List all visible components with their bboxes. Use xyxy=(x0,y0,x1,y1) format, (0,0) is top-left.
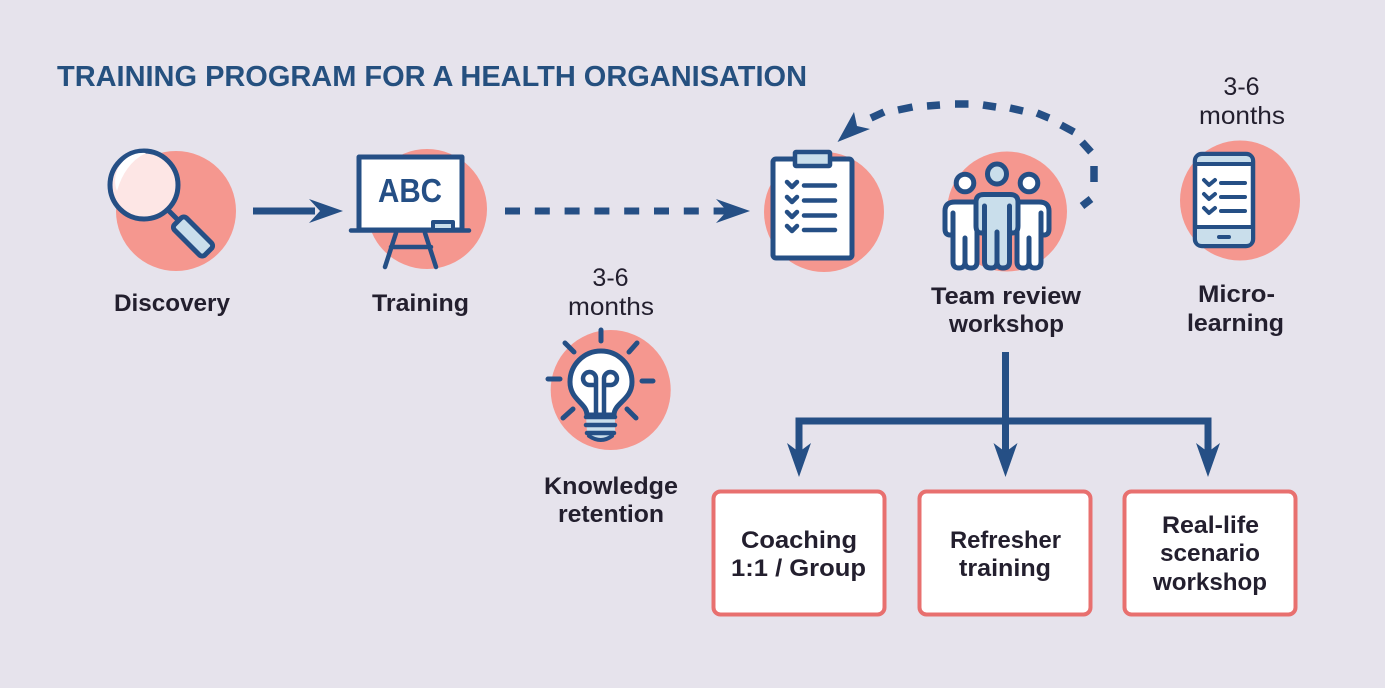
box: real-life scenario workshop: Real-life xyxy=(1162,512,1259,539)
label: Training: Training xyxy=(372,290,469,317)
icon: light bulb xyxy=(548,330,653,440)
label: Discovery: Discovery xyxy=(114,290,231,317)
label: 3-6 months: months xyxy=(568,293,654,321)
label: Knowledge retention: Knowledge xyxy=(544,473,678,500)
label: Knowledge retention: retention xyxy=(558,501,664,528)
label: Team review workshop: Team review xyxy=(931,283,1081,310)
step: team review workshop xyxy=(931,152,1081,338)
step: checklist xyxy=(764,152,884,272)
title: TRAINING PROGRAM FOR A HEALTH ORGANISATION xyxy=(57,61,807,93)
step: discovery xyxy=(110,151,236,317)
box: coaching: Coaching xyxy=(741,527,857,554)
label: Team review workshop: workshop xyxy=(948,311,1064,338)
label: Micro-learning: Micro- xyxy=(1198,281,1275,308)
step: knowledge retention xyxy=(544,264,678,528)
box: real-life scenario workshop xyxy=(1124,492,1296,614)
box: refresher training xyxy=(920,492,1090,614)
dashed arrow: training to assessment xyxy=(505,199,750,223)
icon: magnifying glass xyxy=(110,151,214,258)
arrow: discovery to training xyxy=(253,199,343,223)
icon: whiteboard xyxy=(351,157,469,267)
icon: clipboard xyxy=(773,152,852,258)
box: refresher training: training xyxy=(959,555,1051,582)
box: coaching: 1:1 / Group xyxy=(731,555,866,582)
branching arrows: team review to follow-up activities xyxy=(787,352,1220,477)
box: real-life scenario workshop: scenario xyxy=(1160,540,1260,567)
box: real-life scenario workshop: workshop xyxy=(1152,569,1267,596)
icon: team of people xyxy=(945,164,1049,268)
icon: smartphone xyxy=(1195,154,1253,246)
box: coaching xyxy=(714,492,884,614)
label: 3-6 months: 3-6 xyxy=(592,264,629,292)
box: refresher training: Refresher xyxy=(950,527,1061,554)
icon: whiteboard: ABC xyxy=(378,172,442,209)
label: 3-6 months: 3-6 xyxy=(1223,73,1260,101)
label: 3-6 months: months xyxy=(1199,102,1285,130)
step: training xyxy=(351,149,487,317)
dashed loop arrow: team review back to checklist xyxy=(838,104,1094,206)
label: Micro-learning: learning xyxy=(1187,310,1284,337)
step: micro-learning xyxy=(1180,73,1300,337)
